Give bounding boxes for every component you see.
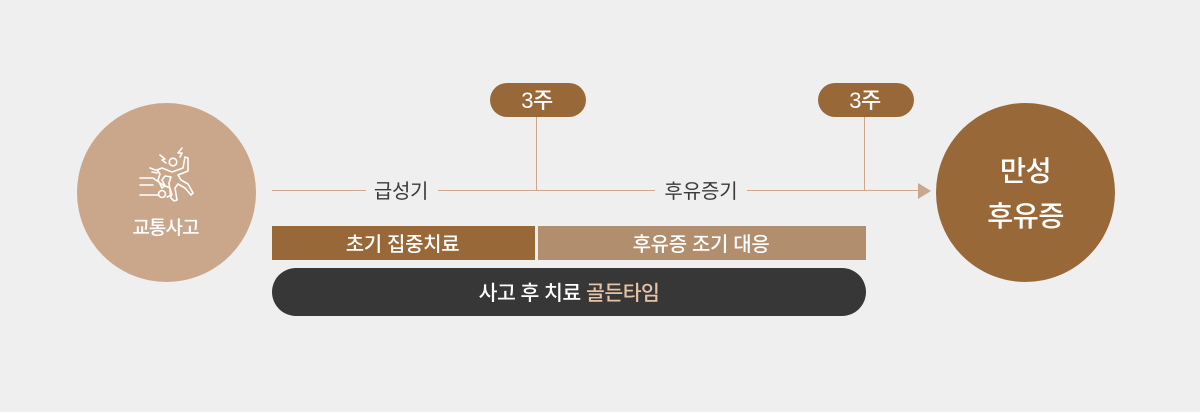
bar: golden time: 사고 후 치료 골든타임 (479, 282, 659, 305)
bar: early intensive treatment (272, 226, 535, 260)
bar: early sequela response (538, 226, 866, 260)
bar: early sequela response: 후유증 조기 대응 (633, 234, 769, 256)
badge: second 3 weeks (818, 83, 914, 117)
timeline line middle (438, 190, 655, 191)
label: acute phase: 급성기 (374, 180, 428, 202)
timeline line left (272, 190, 366, 191)
bar: early intensive treatment: 초기 집중치료 (346, 234, 459, 256)
timeline line right (747, 190, 920, 191)
circle: chronic sequela (936, 103, 1115, 282)
connector: first 3 weeks (536, 117, 537, 190)
arrow head (918, 183, 931, 199)
bar: golden time (272, 268, 866, 316)
label: post-sequela phase: 후유증기 (664, 180, 738, 202)
badge: second 3 weeks: 3주 (849, 88, 881, 113)
icon: person hit by car (139, 147, 194, 202)
circle: chronic sequela: 만성 (1000, 156, 1051, 188)
circle: chronic sequela: 후유증 (987, 200, 1064, 232)
badge: first 3 weeks (490, 83, 586, 117)
connector: second 3 weeks (864, 117, 865, 190)
badge: first 3 weeks: 3주 (521, 88, 553, 113)
circle: traffic accident (77, 103, 256, 282)
text: accident label: 교통사고 (132, 218, 199, 238)
